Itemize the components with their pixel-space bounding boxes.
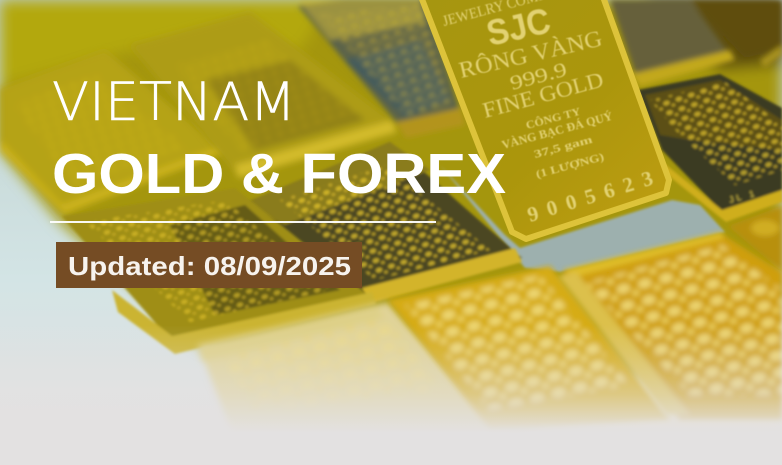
- title: VIETNAM: VIETNAM: [52, 72, 296, 133]
- gold bar: top right dark: [610, 0, 782, 86]
- gold bar: right dark: JL 1: [728, 188, 758, 205]
- main SJC gold bar: [420, 0, 669, 239]
- engraved bar text: 999.9: [508, 59, 569, 95]
- gold bar: bottom right: [558, 232, 782, 420]
- gold bar: bottom centre: [198, 302, 510, 440]
- pale base under fading bars: [230, 380, 782, 433]
- fade to grey at bottom: [0, 325, 782, 433]
- engraved bar text: [441, 0, 656, 227]
- table gap: behind main bar: [440, 165, 725, 272]
- gold bar: bottom middle: [388, 266, 670, 430]
- engraved bar text: 37,5 gam: [533, 134, 594, 161]
- engraved bar text: 9005623: [524, 166, 656, 227]
- gold bar: lower left: [62, 188, 376, 354]
- engraved bar text: (1 LƯỢNG): [535, 151, 606, 181]
- engraved bar text: CÔNG TY: [524, 105, 582, 132]
- engraved bar text: RÔNG VÀNG: [456, 25, 604, 83]
- gold bar: right dark: [638, 74, 782, 222]
- date badge: [56, 242, 362, 288]
- engraved bar text: VÀNG BẠC ĐÁ QUÝ: [500, 109, 614, 152]
- gold bar: top centre: [130, 12, 397, 178]
- divider rule: [50, 221, 436, 223]
- gold bar: right small: [728, 206, 782, 272]
- gold bar: centre dark: [240, 142, 522, 304]
- gold bar: top middle dark: [298, 0, 465, 138]
- engraved bar text: FINE GOLD: [480, 67, 606, 123]
- date badge: Updated: 08/09/2025: [68, 251, 351, 281]
- gold bar: top left: [0, 50, 225, 214]
- title: GOLD & FOREX: GOLD & FOREX: [52, 142, 506, 206]
